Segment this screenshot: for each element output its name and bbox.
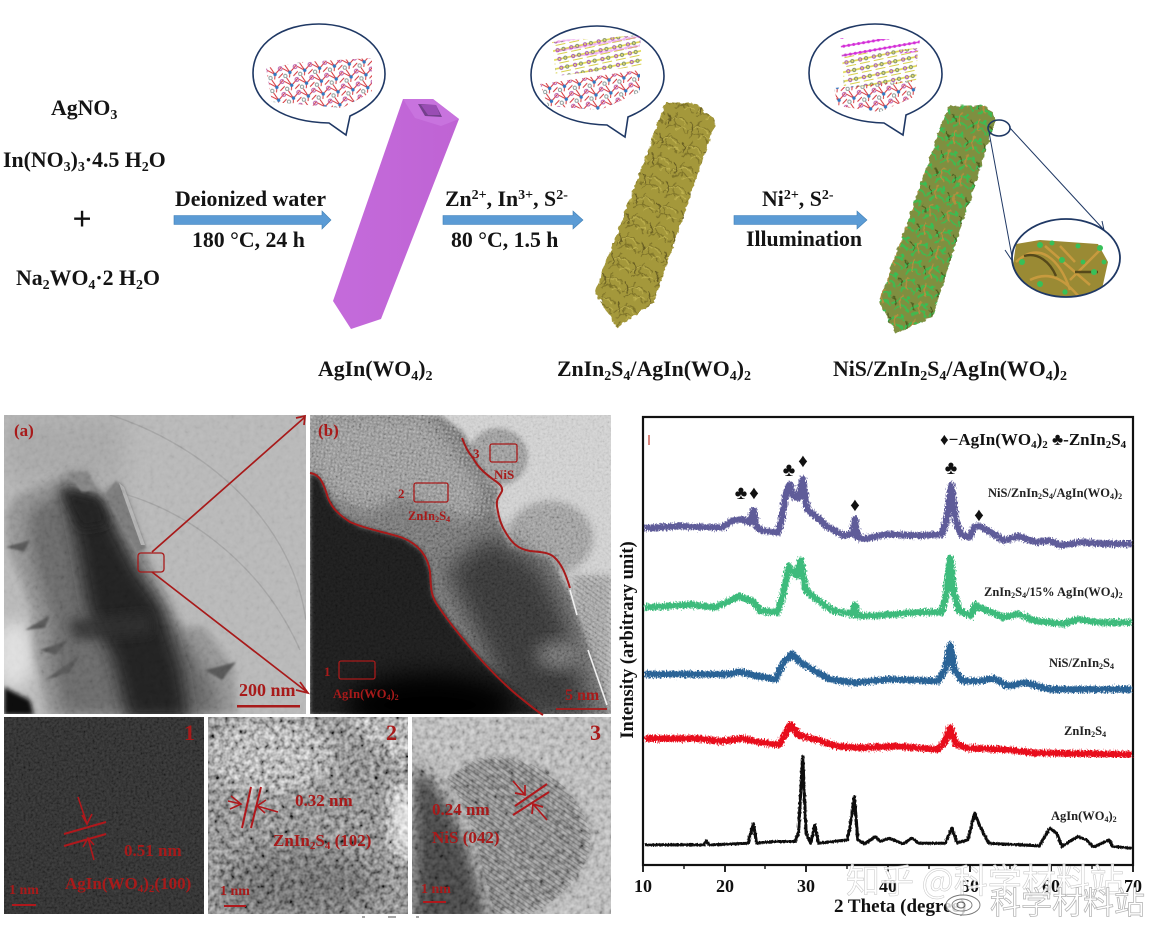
watermark: Zhihu and Weibo source: 科学材料站	[990, 878, 1145, 923]
arrow: NiS deposition step: 2+	[784, 188, 799, 203]
arrow: NiS deposition step: Illumination	[746, 227, 862, 251]
label: ZnIn2S4/AgIn(WO4)2: /AgIn(WO	[629, 357, 730, 381]
x axis labels	[634, 876, 1142, 917]
icon: AgIn(WO4)2 crystal bubble	[253, 24, 385, 135]
panel 2: ZnIn2S4 lattice: 2	[386, 720, 397, 745]
panel 3: NiS lattice: NiS (042)	[432, 828, 500, 847]
text block: precursors: Na	[16, 266, 43, 290]
series labels: ZnIn	[1064, 724, 1091, 738]
arrow: ZnIn2S4 growth step: 2-	[556, 188, 568, 203]
label: AgIn(WO4)2: 4	[411, 369, 418, 384]
panel 1: AgIn(WO4)2 lattice	[4, 717, 204, 914]
peak markers: ♦	[850, 495, 860, 516]
annotations (b): AgIn(WO	[333, 687, 386, 701]
text block: precursors: 2	[142, 160, 149, 175]
x axis labels: 30	[797, 876, 815, 896]
arrow: NiS deposition step: , S	[799, 187, 822, 211]
text block: precursors: 3	[78, 160, 85, 175]
annotations (b): 1	[324, 664, 330, 679]
series labels: S	[1042, 486, 1049, 500]
annotations (b): )	[390, 687, 395, 701]
panel 3: NiS lattice: 1 nm	[421, 882, 451, 897]
x axis labels: 70	[1124, 876, 1142, 896]
annotations (b): 2	[395, 693, 399, 702]
label: ZnIn2S4/AgIn(WO4)2: 2	[744, 369, 751, 384]
annotations (b): NiS	[494, 467, 514, 482]
panel 3: NiS lattice: 3	[590, 720, 601, 745]
label: AgIn(WO4)2: 2	[426, 369, 433, 384]
series labels: 2	[1113, 815, 1117, 824]
label: ZnIn2S4/AgIn(WO4)2: 4	[730, 369, 737, 384]
annotations (a): 200 nm	[239, 680, 296, 700]
panel: synthesis scheme	[3, 24, 1120, 384]
series labels: 4	[1110, 492, 1114, 501]
series labels: 4	[1110, 662, 1114, 671]
series labels: )	[1114, 585, 1119, 599]
annotations (b): 4	[386, 693, 390, 702]
text block: precursors: In(NO	[3, 148, 64, 172]
peak markers: ♦	[974, 505, 984, 526]
text block: precursors: O	[149, 148, 166, 172]
arrow: ZnIn2S4 growth step: 3+	[518, 188, 533, 203]
legend: S	[1111, 430, 1121, 449]
panel 2: ZnIn2S4 lattice: 1 nm	[220, 884, 250, 899]
series labels: 4	[1049, 492, 1053, 501]
text block: precursors: ·4.5 H	[85, 148, 142, 172]
icon: ZnIn2S4 coated rod	[595, 102, 716, 328]
label: NiS/ZnIn2S4/AgIn(WO4)2: 2	[1060, 369, 1067, 384]
peak markers	[735, 451, 984, 526]
text block: precursors: 2	[43, 278, 50, 293]
text block: precursors: AgNO	[51, 96, 110, 120]
series labels: )	[1108, 809, 1113, 823]
x axis labels: 40	[879, 876, 897, 896]
annotations (a): (a)	[14, 421, 34, 440]
text block: precursors: 2	[136, 278, 143, 293]
arrow: ZnIn2S4 growth step: , S	[533, 187, 556, 211]
annotations (b)	[310, 421, 607, 715]
text block: precursors: 4	[88, 278, 95, 293]
text block: precursors: 3	[110, 108, 117, 123]
panel 1: AgIn(WO4)2 lattice: )	[143, 874, 149, 893]
label: NiS/ZnIn2S4/AgIn(WO4)2: S	[927, 357, 939, 381]
series labels: /15% AgIn(WO	[1025, 585, 1111, 599]
annotations (b): S	[439, 509, 446, 523]
series labels	[984, 486, 1123, 824]
y axis label: Intensity (arbitrary unit)	[618, 541, 638, 739]
label: ZnIn2S4/AgIn(WO4)2: 4	[623, 369, 630, 384]
series labels: S	[1095, 724, 1102, 738]
curve: NiS/ZnIn2S4	[645, 645, 1132, 689]
panel 2: ZnIn2S4 lattice: ZnIn	[273, 831, 310, 850]
annotations (a)	[14, 416, 308, 708]
series labels: S	[1015, 585, 1022, 599]
label: ZnIn2S4/AgIn(WO4)2: )	[737, 357, 744, 381]
annotations (b): 3	[473, 446, 480, 461]
arrow: NiS deposition step: Ni	[762, 187, 784, 211]
panel 2: ZnIn2S4 lattice: 4	[325, 840, 331, 852]
curve: NiS/ZnIn2S4/AgIn(WO4)2	[645, 479, 1132, 545]
x axis labels: 60	[1042, 876, 1060, 896]
legend: )	[1037, 430, 1042, 449]
legend: 4	[1031, 439, 1037, 451]
legend: 2	[1106, 439, 1112, 451]
icon: NiS/ZnIn2S4 crystal bubble	[809, 24, 942, 135]
series labels: 2	[1091, 730, 1095, 739]
curve: ZnIn2S4	[645, 724, 1132, 755]
series labels: 4	[1022, 591, 1026, 600]
annotations (b): 4	[446, 515, 450, 524]
panel 1: AgIn(WO4)2 lattice: 2	[149, 883, 155, 895]
panel 1: AgIn(WO4)2 lattice: (100)	[154, 874, 191, 893]
label: NiS/ZnIn2S4/AgIn(WO4)2: 4	[1046, 369, 1053, 384]
panel 1: AgIn(WO4)2 lattice: AgIn(WO	[65, 874, 138, 893]
label: NiS/ZnIn2S4/AgIn(WO4)2: 4	[939, 369, 946, 384]
text block: precursors: 3	[64, 160, 71, 175]
series labels: 2	[1038, 492, 1042, 501]
arrow: ZnIn2S4 growth step	[443, 187, 583, 252]
panel 1: AgIn(WO4)2 lattice: 4	[138, 883, 144, 895]
series labels: NiS/ZnIn	[988, 486, 1038, 500]
series labels: /AgIn(WO	[1052, 486, 1110, 500]
series labels: 4	[1110, 591, 1114, 600]
series labels: )	[1114, 486, 1118, 500]
peak markers: ♣	[783, 460, 795, 481]
watermark: Zhihu and Weibo source: 知乎 @科学材料站	[846, 854, 1124, 903]
panel 2: ZnIn2S4 lattice	[208, 717, 417, 920]
series labels: 2	[1118, 492, 1122, 501]
annotations (b): 5 nm	[565, 687, 600, 704]
arrow: ZnIn2S4 growth step: Zn	[445, 187, 472, 211]
x axis labels: 50	[961, 876, 979, 896]
panel 2: ZnIn2S4 lattice: 0.32 nm	[295, 791, 353, 810]
plot frame and ticks	[643, 417, 1133, 872]
panel (b): HRTEM interface	[310, 415, 611, 737]
series labels: ZnIn	[984, 585, 1011, 599]
chart: XRD patterns	[618, 417, 1142, 917]
icon: NiS decorated rod	[879, 105, 996, 334]
arrow: hydrothermal step	[174, 187, 331, 252]
icon: ZnIn2S4 crystal bubble	[531, 26, 664, 137]
label: AgIn(WO4)2: AgIn(WO	[318, 357, 411, 381]
legend: 2	[1042, 439, 1048, 451]
panel 1: AgIn(WO4)2 lattice: 0.51 nm	[124, 841, 182, 860]
arrow: ZnIn2S4 growth step: 80 °C, 1.5 h	[451, 228, 558, 252]
series labels: 2	[1099, 662, 1103, 671]
panel 1: AgIn(WO4)2 lattice: 1	[184, 720, 195, 745]
panel 2: ZnIn2S4 lattice: (102)	[330, 831, 371, 850]
label: NiS/ZnIn2S4/AgIn(WO4)2: )	[1053, 357, 1060, 381]
text block: precursors: WO	[50, 266, 88, 290]
arrow: ZnIn2S4 growth step: , In	[487, 187, 518, 211]
icon: AgIn(WO4)2 hollow prism	[333, 99, 459, 329]
annotations (b): ZnIn	[408, 509, 435, 523]
series labels: NiS/ZnIn	[1049, 656, 1099, 670]
x axis labels: 2 Theta (degree)	[834, 896, 966, 917]
small mark	[648, 435, 650, 445]
panel (a): TEM overview	[0, 415, 306, 720]
annotations (b): (b)	[318, 421, 339, 440]
label: AgIn(WO4)2: )	[418, 357, 426, 381]
label: NiS/ZnIn2S4/AgIn(WO4)2: /AgIn(WO	[945, 357, 1046, 381]
arrow: hydrothermal step: Deionized water	[175, 187, 326, 211]
watermark: Zhihu and Weibo source	[846, 854, 1145, 923]
arrow: NiS deposition step: 2-	[822, 188, 834, 203]
series labels: 2	[1011, 591, 1015, 600]
text block: precursors: +	[72, 201, 92, 238]
arrow: hydrothermal step: 180 °C, 24 h	[192, 228, 305, 252]
label: ZnIn2S4/AgIn(WO4)2: 2	[604, 369, 611, 384]
text block: precursors: ·2 H	[95, 266, 136, 290]
x axis labels: 20	[716, 876, 734, 896]
series labels: 4	[1102, 730, 1106, 739]
series labels: AgIn(WO	[1051, 809, 1104, 823]
curve: ZnIn2S4/15% AgIn(WO4)2	[645, 558, 1132, 624]
series labels: 2	[1119, 591, 1123, 600]
series labels: 4	[1104, 815, 1108, 824]
legend: ♣-ZnIn	[1048, 430, 1106, 449]
legend: ♦−AgIn(WO	[940, 430, 1031, 449]
icon: magnified rod detail	[988, 120, 1120, 298]
text block: precursors	[3, 96, 166, 293]
text block: precursors: O	[143, 266, 160, 290]
panel 3: NiS lattice: 0.24 nm	[432, 800, 490, 819]
peak markers: ♦	[798, 451, 808, 472]
arrow: ZnIn2S4 growth step: 2+	[472, 188, 487, 203]
arrow: NiS deposition step	[734, 187, 867, 251]
series labels: S	[1103, 656, 1110, 670]
curve: AgIn(WO4)2	[645, 756, 1132, 848]
peak markers: ♣	[945, 458, 957, 479]
panel 3: NiS lattice	[412, 717, 611, 925]
label: ZnIn2S4/AgIn(WO4)2: S	[611, 357, 623, 381]
panel 1: AgIn(WO4)2 lattice: 1 nm	[9, 883, 39, 898]
panel 2: ZnIn2S4 lattice: S	[315, 831, 325, 850]
small source marks below panels	[362, 916, 419, 918]
annotations (b): 2	[435, 515, 439, 524]
label: NiS/ZnIn2S4/AgIn(WO4)2: NiS/ZnIn	[833, 357, 920, 381]
panel 2: ZnIn2S4 lattice: 2	[310, 840, 316, 852]
label: ZnIn2S4/AgIn(WO4)2: ZnIn	[557, 357, 604, 381]
legend: 4	[1121, 439, 1127, 451]
annotations (b): 2	[398, 486, 404, 501]
x axis labels: 10	[634, 876, 652, 896]
peak markers: ♦	[749, 483, 759, 504]
text block: precursors: )	[71, 148, 78, 172]
peak markers: ♣	[735, 483, 747, 504]
label: NiS/ZnIn2S4/AgIn(WO4)2: 2	[920, 369, 927, 384]
